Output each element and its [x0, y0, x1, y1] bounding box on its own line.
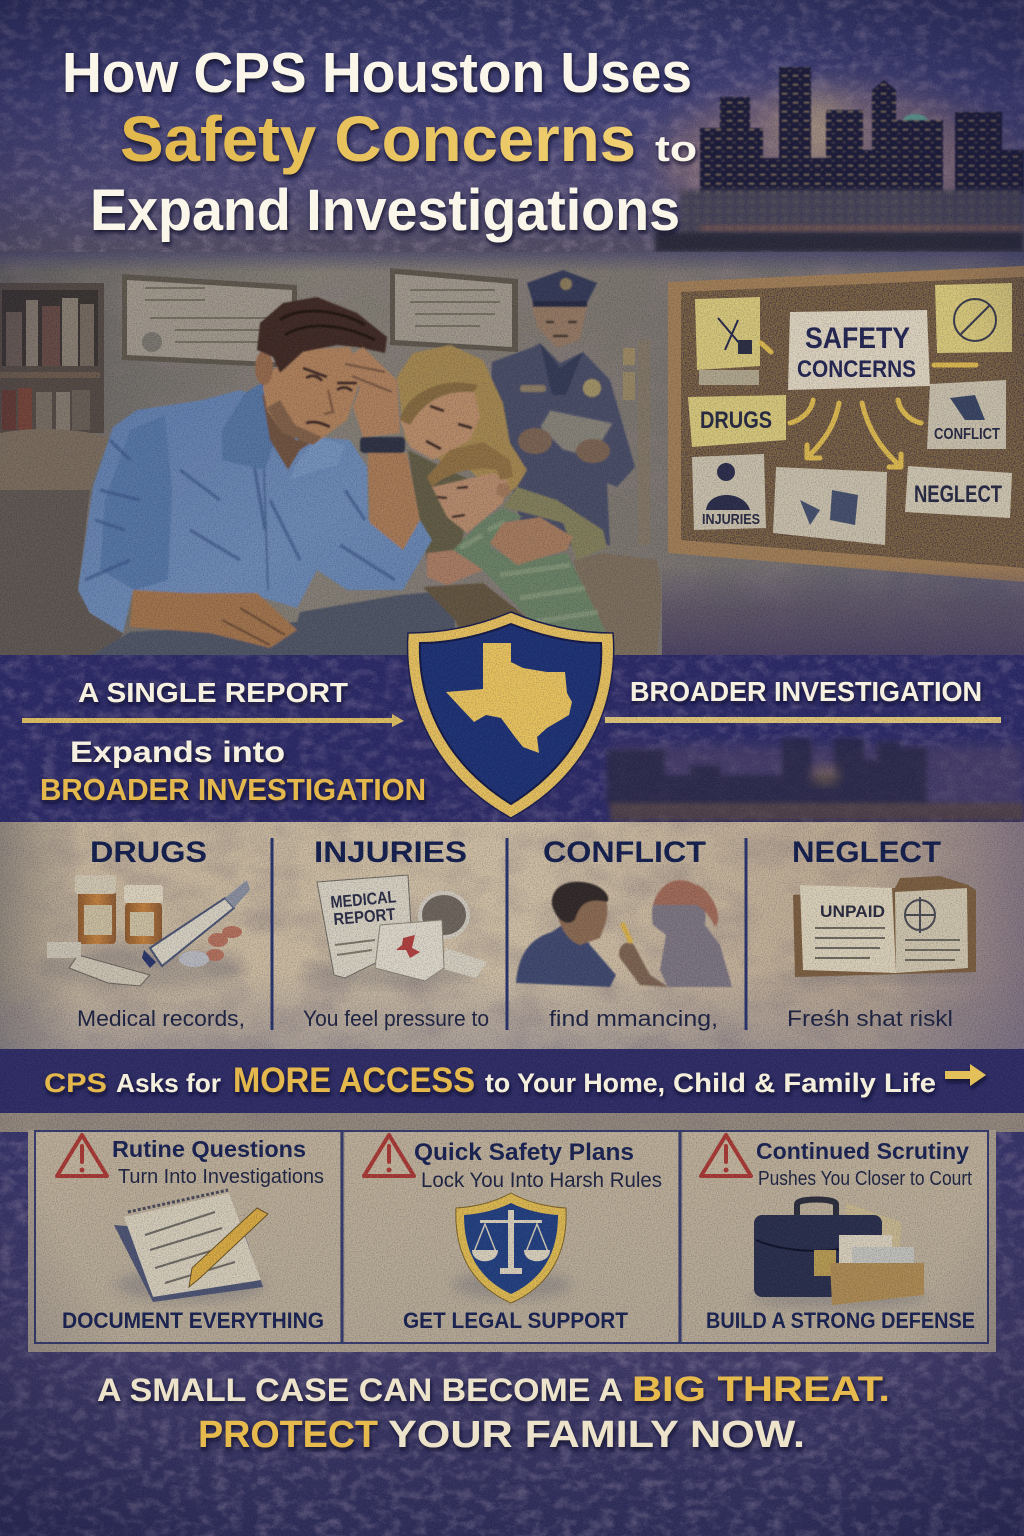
banner: more access: Asks for — [116, 1068, 221, 1098]
icon: medical report: MEDICAL — [330, 887, 397, 912]
board note: top right — [935, 283, 1012, 353]
card: routine questions: Rutine Questions — [112, 1136, 306, 1162]
board note: yellow scribble — [695, 297, 760, 385]
category: conflict — [516, 836, 732, 1031]
panel: risk categories — [0, 822, 1024, 1049]
banner: more access: Child & Family Life — [673, 1068, 936, 1098]
category: injuries: INJURIES — [314, 836, 467, 869]
banner: more access: MORE ACCESS — [233, 1061, 475, 1100]
man: shirt — [78, 390, 432, 633]
card: continued scrutiny: Continued Scrutiny — [756, 1138, 969, 1164]
category: conflict: find mmancing, — [549, 1006, 718, 1031]
boy: shirt — [453, 508, 612, 656]
bookshelf — [0, 283, 104, 433]
category: conflict: CONFLICT — [543, 836, 706, 869]
icon: unpaid folder — [780, 876, 980, 983]
banner: more access — [44, 1061, 986, 1100]
icon: scales shield — [452, 1193, 572, 1303]
card: quick safety plans: GET LEGAL SUPPORT — [403, 1308, 629, 1333]
panel: hero scene — [0, 252, 1024, 656]
sofa — [0, 429, 662, 656]
category: injuries: You feel pressure to — [303, 1006, 489, 1031]
man: raised arm and hand — [368, 453, 420, 550]
label: broader investigation gold: BROADER INVESTIGATION — [40, 772, 426, 807]
icon: arrow right — [945, 1064, 986, 1086]
framed diplomas — [122, 268, 518, 368]
hero fade — [662, 565, 1024, 656]
icon: warning — [57, 1135, 107, 1176]
board note: drugs: DRUGS — [700, 407, 772, 434]
man: lower forearm and hand — [130, 590, 297, 648]
boy — [423, 442, 612, 656]
category: drugs: DRUGS — [90, 836, 207, 869]
board note: conflict — [927, 380, 1006, 449]
band labels — [40, 676, 982, 807]
door frame — [623, 340, 650, 545]
category: drugs — [40, 836, 250, 1031]
skyline top right — [655, 67, 1024, 252]
banner: more access: CPS — [44, 1068, 107, 1098]
category: neglect — [780, 836, 980, 1031]
card: continued scrutiny — [683, 1131, 988, 1343]
board note: safety concerns — [788, 310, 930, 390]
banner: more access: to Your Home, — [485, 1068, 665, 1098]
card: routine questions: DOCUMENT EVERYTHING — [62, 1308, 324, 1333]
icon: warning — [701, 1135, 751, 1176]
board note: documents — [773, 467, 887, 545]
title word to: to — [655, 128, 697, 169]
man — [78, 297, 455, 656]
icon: unpaid folder: UNPAID — [820, 902, 885, 921]
board note: safety concerns: SAFETY — [805, 322, 910, 355]
police officer — [490, 270, 635, 545]
icon: briefcase — [750, 1200, 930, 1308]
room wall — [0, 252, 1024, 656]
card: routine questions — [35, 1131, 340, 1343]
arrow to shield — [22, 714, 404, 727]
label: broader investigation right: BROADER INVESTIGATION — [630, 676, 982, 707]
title line 2 highlight: Safety Concerns — [120, 103, 636, 175]
icon: warning — [364, 1135, 414, 1176]
icon: notebook and pencil — [114, 1190, 268, 1302]
man: hair — [257, 297, 387, 373]
board arrows — [761, 343, 976, 467]
footer callout: A SMALL CASE CAN BECOME A — [97, 1372, 623, 1408]
title line 1: How CPS Houston Uses — [62, 41, 692, 105]
board note: safety concerns: CONCERNS — [797, 356, 916, 383]
category: drugs: Medical records, — [77, 1006, 245, 1031]
card: quick safety plans: Lock You Into Harsh Rules — [421, 1169, 662, 1192]
title — [62, 41, 697, 243]
board note: drugs — [688, 395, 786, 447]
woman: hand on boy — [490, 517, 573, 565]
board note: injuries: INJURIES — [702, 511, 760, 528]
category: neglect: Freśh shat riskl — [787, 1006, 953, 1031]
icon: medicine and syringe — [40, 875, 250, 988]
band: more access background — [0, 1049, 1024, 1113]
icon: arguing couple — [516, 880, 732, 987]
corkboard — [668, 266, 1024, 582]
footer callout: BIG THREAT. — [632, 1370, 890, 1409]
woman — [397, 345, 607, 560]
card: continued scrutiny: BUILD A STRONG DEFENSE — [706, 1308, 975, 1333]
icon: medical report — [310, 875, 487, 987]
column dividers — [272, 838, 746, 1030]
low buildings — [680, 190, 1024, 234]
boy: trousers — [423, 583, 540, 656]
card: quick safety plans: Quick Safety Plans — [414, 1139, 634, 1166]
icon: medical report: REPORT — [333, 905, 397, 929]
label: expands into: Expands into — [70, 736, 285, 769]
board note: neglect — [905, 466, 1012, 518]
category: neglect: NEGLECT — [792, 836, 941, 869]
line right — [605, 717, 1001, 723]
title line 3: Expand Investigations — [90, 178, 680, 243]
footer callout: YOUR FAMILY NOW. — [388, 1414, 805, 1456]
band: report flow — [0, 655, 1024, 822]
boy: head — [432, 473, 508, 533]
label: a single report: A SINGLE REPORT — [78, 677, 348, 708]
category: injuries — [303, 836, 489, 1031]
icon: texas shield — [408, 612, 614, 818]
board note: conflict: CONFLICT — [934, 426, 1000, 443]
man: features — [303, 368, 357, 427]
shoreline — [655, 232, 1024, 252]
footer callout — [97, 1370, 890, 1456]
boy: arm — [427, 550, 483, 585]
card frame and dividers — [35, 1131, 988, 1344]
card: routine questions: Turn Into Investigations — [118, 1166, 324, 1188]
footer callout: PROTECT — [198, 1414, 378, 1456]
card: quick safety plans — [345, 1131, 678, 1343]
panel: warnings and actions — [0, 1113, 1024, 1352]
card: continued scrutiny: Pushes You Closer to Court — [758, 1168, 972, 1190]
board note: injuries — [692, 454, 766, 530]
man: legs — [90, 590, 455, 656]
man: head — [263, 347, 360, 445]
lower skyline — [607, 738, 1024, 821]
towers — [700, 67, 1024, 195]
